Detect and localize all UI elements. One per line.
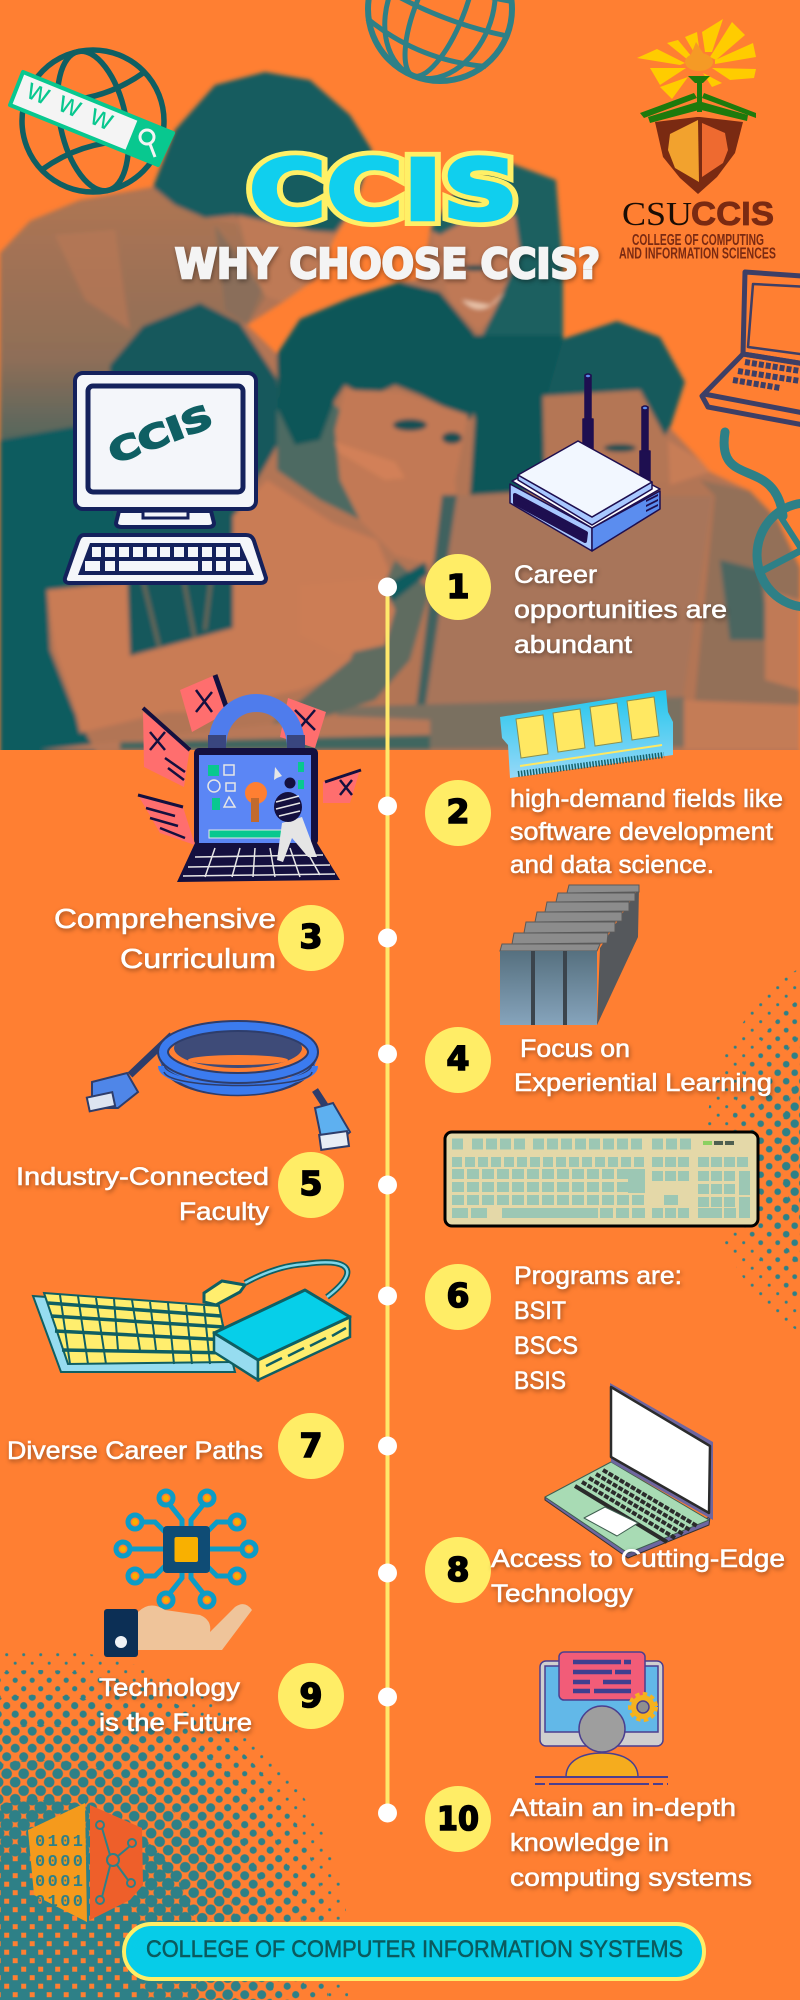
number badge 10 [425, 1786, 491, 1852]
number badge 8: 8 [447, 1550, 469, 1589]
icon: server racks [500, 885, 639, 1025]
step 2 text: high-demand fields like [510, 785, 783, 813]
step 4 text [514, 1035, 772, 1097]
step 6 text: BSIS [514, 1367, 566, 1395]
icon: chip circuit on open hand [104, 1491, 256, 1657]
footer pill [124, 1924, 704, 1979]
step 5 text [16, 1163, 270, 1226]
icon: outline laptop at right edge [702, 272, 800, 430]
icon: open isometric laptop [545, 1383, 713, 1558]
step 8 text [491, 1545, 785, 1608]
number badge 5 [278, 1152, 344, 1218]
icon: faded hexagon emblem over dots [28, 1803, 143, 1922]
step 2 [425, 780, 783, 879]
icon: network cable [87, 1026, 350, 1150]
step 9 text [99, 1674, 252, 1737]
step 9 [99, 1663, 344, 1737]
icon: www globe with search bar: www [21, 73, 118, 137]
step 6 [425, 1262, 682, 1395]
step 8 [425, 1537, 785, 1608]
step 4 text: Experiential Learning [514, 1069, 772, 1097]
step 1 text: abundant [514, 631, 632, 659]
number badge 3 [278, 905, 344, 971]
step 1 text: opportunities are [514, 596, 727, 624]
icon: yellow keyboard with cyan hub [33, 1262, 350, 1380]
number badge 9 [278, 1663, 344, 1729]
step 9 text: is the Future [99, 1709, 252, 1737]
step 5 text: Industry-Connected [16, 1163, 269, 1191]
footer pill: COLLEGE OF COMPUTER INFORMATION SYSTEMS [146, 1936, 683, 1963]
logo: CSU CCIS college emblem [619, 19, 776, 262]
number badge 1 [425, 554, 491, 620]
step 5 [16, 1152, 344, 1226]
number badge 3: 3 [300, 917, 322, 956]
step 7 [7, 1413, 344, 1479]
timeline nodes [378, 578, 397, 1822]
number badge 2 [425, 780, 491, 846]
step 6 text: BSCS [514, 1332, 578, 1360]
step 10 text: knowledge in [510, 1829, 669, 1857]
step 3 text [54, 903, 276, 974]
halftone dots: right edge [708, 970, 800, 1330]
subheading: WHY CHOOSE CCIS? [175, 240, 600, 288]
icon: wireless router [510, 374, 660, 551]
step 3 text: Curriculum [120, 943, 276, 974]
icon: person at monitor with code window [535, 1652, 668, 1784]
icon: faded hexagon emblem over dots: 0000 [35, 1853, 83, 1872]
step 4 [425, 1027, 772, 1097]
step 1 [425, 554, 727, 659]
step 5 text: Faculty [179, 1198, 270, 1226]
step 7 text: Diverse Career Paths [7, 1437, 263, 1465]
main heading CCIS: CCIS [249, 142, 518, 240]
number badge 9: 9 [300, 1676, 322, 1715]
step 6 text [514, 1262, 682, 1395]
number badge 7: 7 [300, 1426, 322, 1465]
step 3 [54, 903, 344, 974]
step 6 text: BSIT [514, 1297, 566, 1325]
icon: desktop computer with CCIS screen [65, 373, 266, 583]
main heading CCIS: CCIS [249, 142, 518, 240]
step 10 text: computing systems [510, 1864, 752, 1892]
icon: faded hexagon emblem over dots: 0001 [35, 1873, 83, 1892]
number badge 4: 4 [447, 1039, 469, 1078]
number badge 5: 5 [300, 1164, 322, 1203]
duotone photo of students at a laptop [0, 72, 800, 760]
halftone dots: bottom left [0, 1645, 352, 2000]
step 1 text: Career [514, 561, 597, 589]
icon: top globe [346, 0, 534, 103]
icon: lock on laptop with documents [138, 675, 361, 882]
step 1 text [514, 561, 727, 659]
icon: desktop computer with CCIS screen: CCIS [103, 397, 218, 471]
step 3 text: Comprehensive [54, 903, 276, 934]
step 4 text: Focus on [520, 1035, 630, 1063]
step 8 text: Access to Cutting-Edge [491, 1545, 785, 1573]
step 2 text: software development [510, 818, 773, 846]
step 10 text [510, 1794, 752, 1892]
number badge 7 [278, 1413, 344, 1479]
icon: RAM memory stick [500, 690, 673, 778]
number badge 10: 10 [437, 1799, 479, 1838]
logo: CSU CCIS college emblem: CCIS [691, 195, 774, 232]
step 6 text: Programs are: [514, 1262, 682, 1290]
number badge 2: 2 [447, 792, 469, 831]
logo: CSU CCIS college emblem: CSU [622, 196, 692, 233]
step 8 text: Technology [491, 1580, 634, 1608]
icon: faded hexagon emblem over dots: 0101 [35, 1833, 83, 1852]
step 10 [425, 1786, 752, 1892]
number badge 4 [425, 1027, 491, 1093]
step 2 text [510, 785, 783, 879]
number badge 1: 1 [447, 567, 469, 606]
icon: computer mouse with cable [724, 432, 800, 607]
step 2 text: and data science. [510, 851, 714, 879]
step 9 text: Technology [99, 1674, 241, 1702]
title [175, 142, 600, 288]
number badge 8 [425, 1537, 491, 1603]
number badge 6: 6 [447, 1276, 469, 1315]
line: timeline spine [386, 587, 390, 1813]
icon: beige full-size keyboard [445, 1132, 758, 1226]
icon: www globe with search bar [10, 39, 173, 203]
icon: faded hexagon emblem over dots: 0100 [35, 1893, 83, 1912]
step 10 text: Attain an in-depth [510, 1794, 736, 1822]
number badge 6 [425, 1264, 491, 1330]
